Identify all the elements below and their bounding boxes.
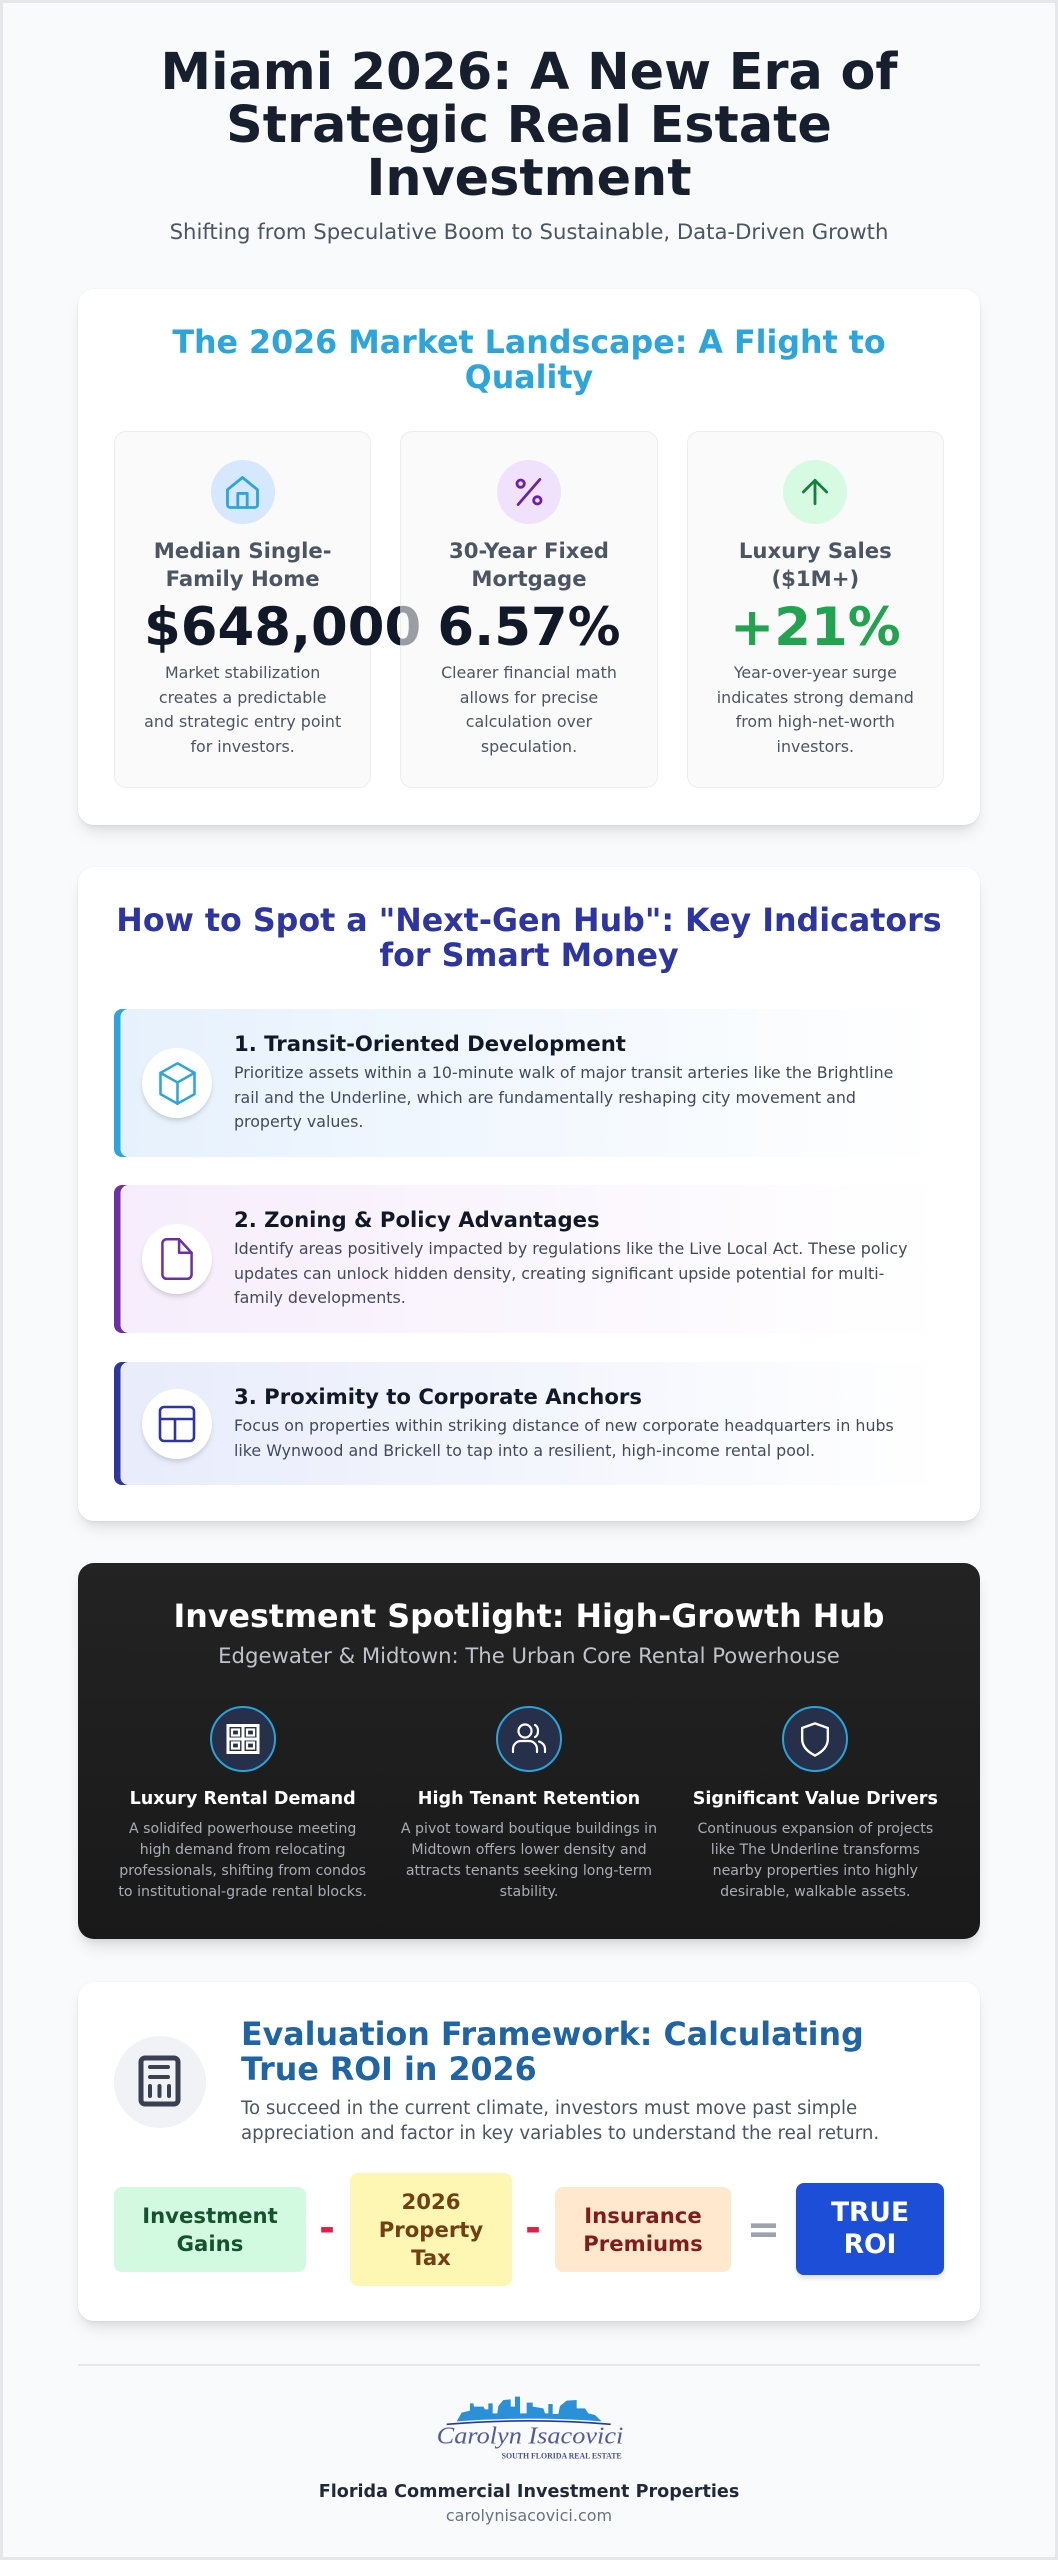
equation term: investment gains: Investment bbox=[142, 2202, 278, 2228]
equation result: true roi: TRUE bbox=[831, 2197, 909, 2228]
indicator 2 bbox=[114, 1185, 944, 1333]
footer website: carolynisacovici.com bbox=[446, 2506, 612, 2525]
panel: next-gen hub indicators bbox=[78, 867, 980, 1521]
indicator description: Focus on properties within striking distance of new corporate headquarters in hubs bbox=[234, 1416, 894, 1435]
spotlight description: like The Underline transforms bbox=[711, 1842, 920, 1858]
indicator title: 1. Transit-Oriented Development bbox=[234, 1031, 626, 1056]
logo: Carolyn Isacovici: Carolyn Isacovici bbox=[437, 2423, 623, 2449]
icon: layout bbox=[142, 1388, 212, 1458]
metric value: $648,000 bbox=[144, 596, 421, 658]
title: Strategic Real Estate bbox=[226, 94, 832, 154]
icon: document bbox=[142, 1224, 212, 1294]
equation term: property tax: Property bbox=[379, 2216, 483, 2242]
title: Investment bbox=[366, 148, 691, 206]
icon: shield bbox=[782, 1706, 848, 1772]
spotlight description bbox=[118, 1820, 367, 1900]
metric card: mortgage bbox=[400, 431, 658, 788]
equation term: insurance premiums bbox=[555, 2187, 731, 2272]
icon: calculator bbox=[114, 2036, 206, 2128]
spotlight description: nearby properties into highly bbox=[713, 1862, 918, 1878]
icon: percent bbox=[497, 460, 561, 524]
metric card: luxury sales bbox=[687, 431, 944, 788]
indicator 3 bbox=[114, 1362, 944, 1485]
equation term: property tax: Tax bbox=[411, 2244, 451, 2270]
framework intro text: appreciation and factor in key variables to understand the real return. bbox=[241, 2123, 879, 2144]
heading: evaluation framework: True ROI in 2026 bbox=[241, 2052, 537, 2088]
icon: cube bbox=[142, 1048, 212, 1118]
metric description: allows for precise bbox=[460, 688, 598, 707]
indicator description: like Wynwood and Brickell to tap into a resilient, high-income rental pool. bbox=[234, 1441, 815, 1460]
icon: house bbox=[210, 460, 274, 524]
spotlight description: to institutional-grade rental blocks. bbox=[118, 1884, 367, 1900]
equation term: investment gains: Gains bbox=[177, 2230, 243, 2256]
indicator description bbox=[234, 1063, 893, 1131]
metric description: speculation. bbox=[481, 737, 577, 756]
spotlight description: A solidifed powerhouse meeting bbox=[129, 1820, 356, 1836]
heading: next-gen hub bbox=[116, 902, 942, 974]
framework intro text bbox=[240, 2098, 879, 2144]
spotlight description: A pivot toward boutique buildings in bbox=[401, 1820, 657, 1836]
metric card: median home bbox=[114, 431, 371, 788]
indicator title: 3. Proximity to Corporate Anchors bbox=[234, 1384, 642, 1409]
panel: market landscape bbox=[78, 289, 980, 825]
heading: next-gen hub: How to Spot a "Next-Gen Hub": Key Indicators bbox=[116, 902, 942, 938]
metric description bbox=[717, 663, 914, 756]
indicator title: 2. Zoning & Policy Advantages bbox=[234, 1207, 600, 1232]
metric description bbox=[441, 663, 617, 756]
equation term: property tax: 2026 bbox=[402, 2188, 460, 2214]
metric description: for investors. bbox=[190, 737, 295, 756]
operator: equals: = bbox=[747, 2207, 780, 2253]
title: Miami 2026: A New Era of bbox=[161, 42, 897, 100]
spotlight description bbox=[697, 1820, 933, 1900]
spotlight column: tenant retention bbox=[401, 1706, 657, 1900]
spotlight title: High Tenant Retention bbox=[418, 1789, 640, 1809]
metric description: investors. bbox=[777, 737, 854, 756]
spotlight description: high demand from relocating bbox=[140, 1842, 346, 1858]
icon: users bbox=[496, 1706, 562, 1772]
heading: market landscape bbox=[172, 324, 886, 396]
spotlight column: rental demand bbox=[118, 1706, 367, 1900]
metric label: 30-Year Fixed bbox=[449, 538, 609, 563]
metric label: ($1M+) bbox=[771, 566, 859, 591]
operator: minus: - bbox=[319, 2206, 335, 2250]
heading: spotlight: Investment Spotlight: High-Growth Hub bbox=[174, 1598, 884, 1634]
metric description: indicates strong demand bbox=[717, 688, 914, 707]
metric description: Clearer financial math bbox=[441, 663, 617, 682]
spotlight description bbox=[401, 1820, 657, 1900]
spotlight subtitle: Edgewater & Midtown: The Urban Core Rental Powerhouse bbox=[218, 1643, 840, 1668]
title bbox=[161, 42, 898, 206]
equation term: property tax bbox=[350, 2173, 512, 2286]
framework intro text: To succeed in the current climate, investors must move past simple bbox=[241, 2098, 857, 2119]
heading: market landscape: Quality bbox=[465, 360, 593, 396]
logo: Carolyn Isacovici bbox=[437, 2396, 623, 2461]
panel: investment spotlight bbox=[78, 1563, 980, 1939]
metric description: from high-net-worth bbox=[736, 712, 895, 731]
metric description: Year-over-year surge bbox=[734, 663, 897, 682]
spotlight description: Midtown offers lower density and bbox=[411, 1842, 647, 1858]
metric label: Luxury Sales bbox=[739, 538, 892, 563]
indicator description bbox=[234, 1239, 907, 1307]
metric value: 6.57% bbox=[437, 596, 621, 658]
footer company name: Florida Commercial Investment Properties bbox=[319, 2482, 739, 2502]
heading: next-gen hub: for Smart Money bbox=[379, 938, 679, 974]
spotlight title: Significant Value Drivers bbox=[693, 1789, 938, 1809]
indicator description: property values. bbox=[234, 1112, 363, 1131]
metric label: Mortgage bbox=[471, 566, 587, 591]
logo: Carolyn Isacovici: SOUTH FLORIDA REAL ESTATE bbox=[502, 2452, 622, 2461]
metric description: calculation over bbox=[466, 712, 592, 731]
metric label: Family Home bbox=[166, 566, 320, 591]
spotlight description: attracts tenants seeking long-term bbox=[406, 1862, 652, 1878]
spotlight description: stability. bbox=[500, 1884, 558, 1900]
spotlight description: Continuous expansion of projects bbox=[697, 1820, 933, 1836]
subtitle: Shifting from Speculative Boom to Sustainable, Data-Driven Growth bbox=[170, 219, 888, 244]
spotlight description: professionals, shifting from condos bbox=[119, 1862, 366, 1878]
metric label bbox=[739, 538, 892, 591]
indicator description: Identify areas positively impacted by regulations like the Live Local Act. These policy bbox=[234, 1239, 907, 1258]
metric description: creates a predictable bbox=[159, 688, 326, 707]
indicator description: rail and the Underline, which are fundamentally reshaping city movement and bbox=[234, 1088, 856, 1107]
metric label bbox=[449, 538, 609, 591]
icon: arrow up bbox=[783, 460, 847, 524]
indicator description bbox=[234, 1416, 894, 1460]
equation term: insurance premiums: Premiums bbox=[583, 2230, 703, 2256]
indicator description: Prioritize assets within a 10-minute walk of major transit arteries like the Brightline bbox=[234, 1063, 893, 1082]
equation term: investment gains bbox=[114, 2187, 306, 2272]
indicator description: updates can unlock hidden density, creating significant upside potential for multi- bbox=[234, 1264, 884, 1283]
indicator 1 bbox=[114, 1009, 944, 1157]
metric description bbox=[144, 663, 341, 756]
spotlight description: desirable, walkable assets. bbox=[720, 1884, 911, 1900]
heading: market landscape: The 2026 Market Landscape: A Flight to bbox=[172, 324, 886, 360]
metric label bbox=[154, 538, 332, 591]
spotlight title: Luxury Rental Demand bbox=[130, 1789, 356, 1809]
metric value: +21% bbox=[730, 596, 901, 658]
metric label: Median Single- bbox=[154, 538, 332, 563]
panel: evaluation framework bbox=[78, 1982, 980, 2321]
indicator description: family developments. bbox=[234, 1288, 406, 1307]
operator: minus: - bbox=[525, 2206, 541, 2250]
icon: building bbox=[210, 1706, 276, 1772]
equation result: true roi: ROI bbox=[844, 2229, 896, 2260]
footer bbox=[78, 2364, 980, 2544]
metric description: Market stabilization bbox=[165, 663, 320, 682]
metric description: and strategic entry point bbox=[144, 712, 341, 731]
spotlight column: value drivers bbox=[693, 1706, 938, 1900]
heading: evaluation framework bbox=[241, 2017, 864, 2088]
heading: evaluation framework: Evaluation Framework: Calculating bbox=[241, 2017, 864, 2053]
equation result: true roi bbox=[796, 2183, 944, 2275]
equation term: insurance premiums: Insurance bbox=[584, 2202, 702, 2228]
